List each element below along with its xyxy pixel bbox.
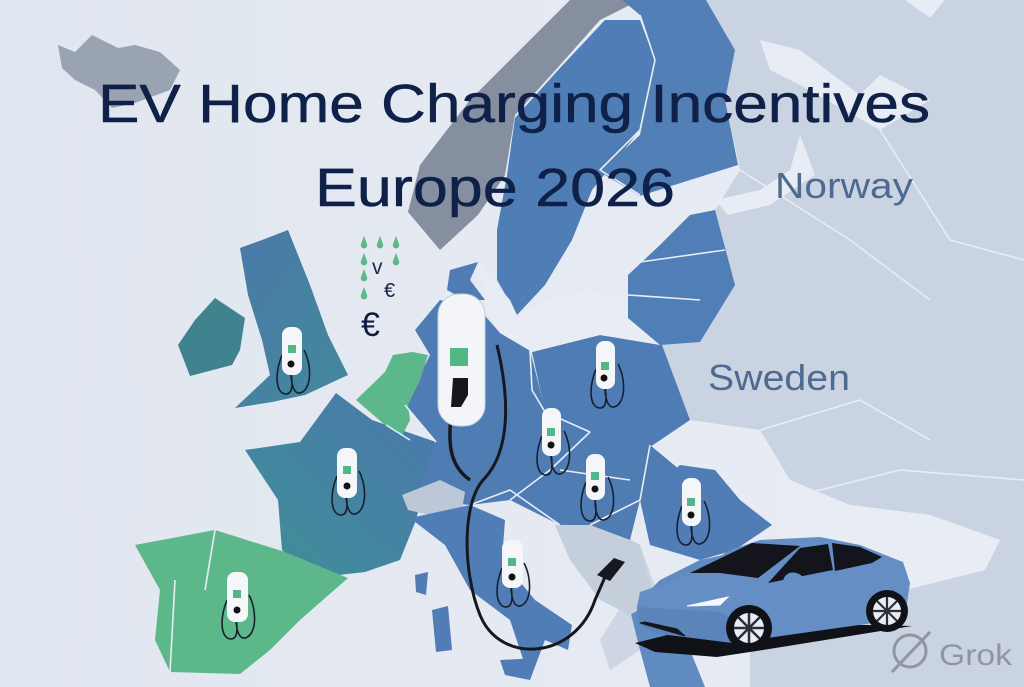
- islands: [415, 572, 538, 680]
- country: spain and portugal: [135, 530, 348, 674]
- balkans: [555, 525, 655, 615]
- icon: drops and euro symbols: v: [372, 256, 383, 279]
- region: eastern europe and russia: [570, 0, 1024, 687]
- country: baltic states: [628, 210, 735, 345]
- icon: charger poland: [591, 341, 624, 408]
- country: poland: [532, 335, 690, 447]
- icon: charger large with cable: [438, 294, 625, 649]
- icon: charger czechia: [537, 408, 570, 475]
- country: romania: [640, 465, 772, 560]
- country: norway: [408, 0, 640, 250]
- country: greece and bulgaria: [630, 545, 770, 687]
- baltic water: [478, 262, 520, 335]
- title: Europe 2026: [315, 158, 675, 218]
- country: france: [245, 393, 436, 578]
- inland seas: [715, 0, 1000, 590]
- title: [98, 74, 930, 218]
- country: netherlands and belgium: [356, 352, 428, 436]
- icon: drops and euro symbols: €: [361, 306, 380, 344]
- country: finland: [600, 0, 738, 196]
- country: iceland: [58, 35, 180, 108]
- icon: drops and euro symbols: [361, 236, 399, 344]
- watermark: grok: Grok: [939, 639, 1013, 672]
- icon: charger uk: [277, 327, 310, 394]
- icon: charger romania: [677, 478, 710, 545]
- icon: charger france: [332, 448, 365, 515]
- icon: charger hungary: [581, 454, 614, 521]
- country: denmark: [447, 262, 485, 300]
- title: EV Home Charging Incentives: [98, 74, 930, 134]
- icon: charger italy: [497, 540, 530, 607]
- country: ireland: [178, 298, 245, 376]
- country: united kingdom: [235, 230, 348, 408]
- border lines: [170, 15, 1024, 672]
- country: sweden: [497, 20, 655, 315]
- watermark: grok: [892, 632, 1013, 672]
- country: germany and central europe: [405, 300, 680, 540]
- icon: charger spain: [222, 572, 255, 639]
- country: italy: [410, 505, 572, 680]
- label: sweden: Sweden: [708, 357, 850, 398]
- icon: drops and euro symbols: €: [384, 280, 395, 302]
- baltic sea south: [500, 290, 660, 352]
- illustration: electric car: [635, 537, 912, 657]
- country: switzerland: [402, 480, 465, 515]
- label: norway: Norway: [775, 165, 913, 206]
